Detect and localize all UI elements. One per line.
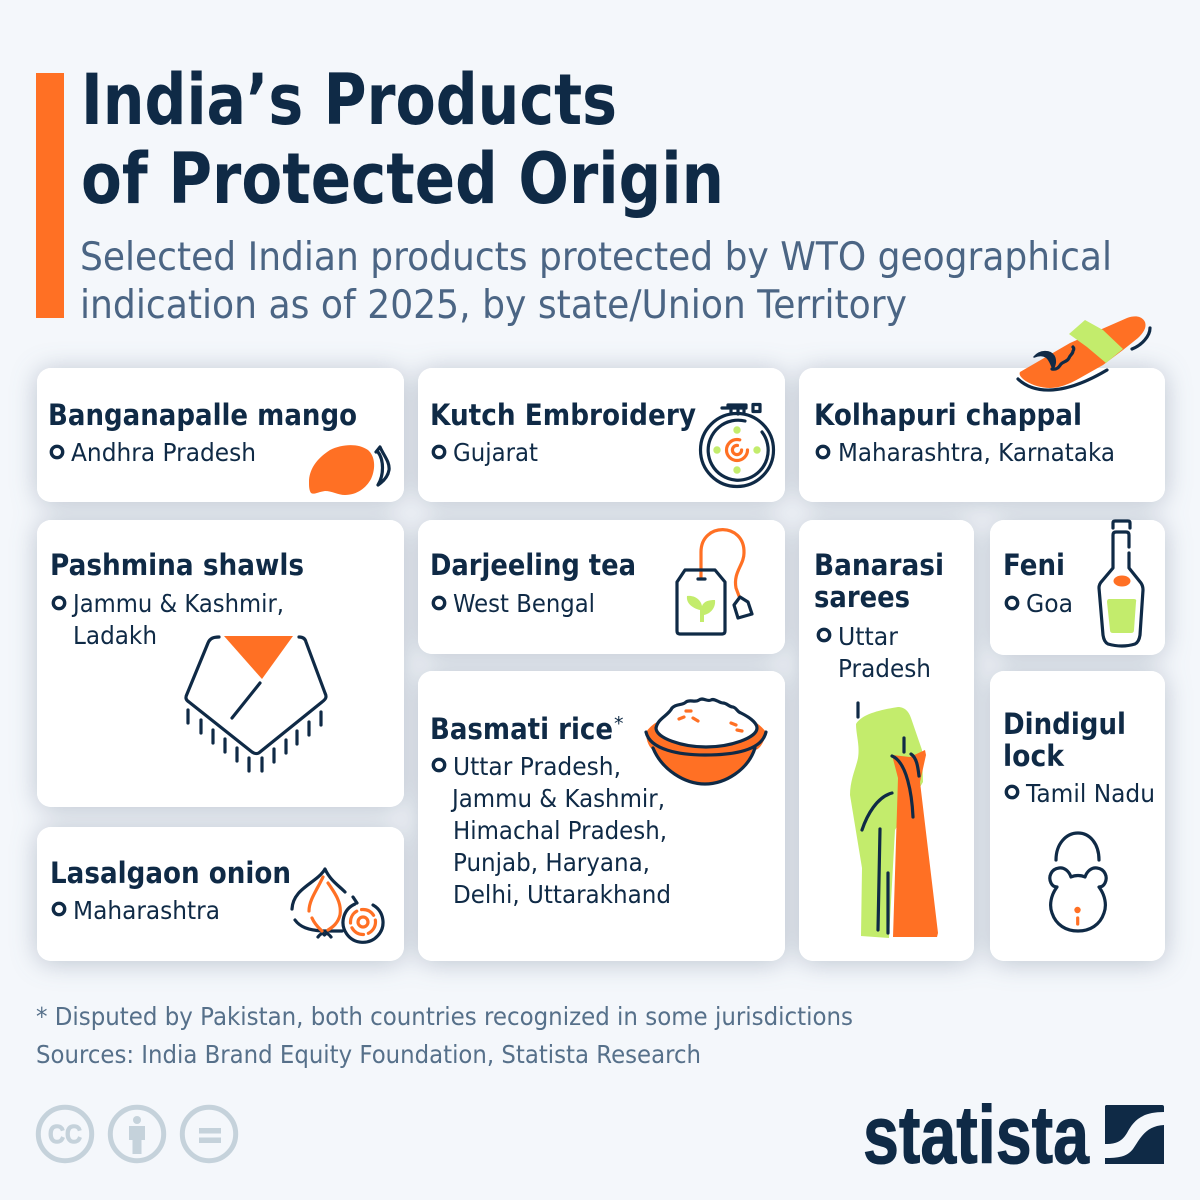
- panel: Basmati rice: Himachal Pradesh,: [453, 816, 667, 845]
- panel: Banganapalle mango: Banganapalle mango: [48, 398, 357, 432]
- panel: Kutch Embroidery: Kutch Embroidery: [430, 398, 696, 432]
- panel: Kolhapuri chappal: [799, 316, 1165, 502]
- icon: saree: [850, 703, 938, 938]
- icon: chappal sandal: [1018, 316, 1150, 390]
- icon: feni bottle: [1099, 521, 1143, 646]
- panel: Pashmina shawls: Pashmina shawls: [50, 548, 304, 582]
- panel: Darjeeling tea: Darjeeling tea: [430, 548, 636, 582]
- subtitle: [80, 235, 1112, 328]
- icon: mango: [309, 445, 389, 495]
- statista logo: statista: [863, 1090, 1090, 1181]
- panel: Kolhapuri chappal: Kolhapuri chappal: [814, 398, 1082, 432]
- panel: Banganapalle mango: Andhra Pradesh: [71, 438, 256, 467]
- panel: Dindigul lock: lock: [1003, 739, 1065, 773]
- panel: Lasalgaon onion: Lasalgaon onion: [50, 856, 291, 890]
- icon: creative commons licence: CC: [48, 1119, 82, 1149]
- panel: Pashmina shawls: [37, 520, 404, 807]
- panel: Feni: Goa: [1026, 589, 1073, 618]
- accent bar: [36, 73, 64, 318]
- panel: Lasalgaon onion: [37, 827, 404, 961]
- panel: Basmati rice: Delhi, Uttarakhand: [453, 880, 671, 909]
- panel: Feni: [990, 520, 1165, 655]
- panel: Basmati rice: [418, 671, 785, 961]
- panel: Dindigul lock: Tamil Nadu: [1025, 779, 1155, 808]
- icon: padlock: [1050, 833, 1106, 931]
- sources: Sources: India Brand Equity Foundation, Statista Research: [36, 1040, 701, 1069]
- panel: Kolhapuri chappal: Maharashtra, Karnataka: [838, 438, 1115, 467]
- icon: onion: [292, 869, 383, 942]
- panel: Basmati rice: Basmati rice: [430, 712, 613, 746]
- panel: Basmati rice: Jammu & Kashmir,: [450, 784, 665, 813]
- panel: Banarasi sarees: Uttar: [838, 622, 899, 651]
- icon: creative commons licence: [38, 1107, 236, 1161]
- footnote: * Disputed by Pakistan, both countries recognized in some jurisdictions: [36, 1002, 853, 1031]
- icon: tea bag: [677, 530, 752, 634]
- panel: Pashmina shawls: Jammu & Kashmir,: [71, 589, 284, 618]
- subtitle: indication as of 2025, by state/Union Territory: [80, 283, 907, 328]
- icon: shawl: [186, 636, 326, 771]
- panel: Banarasi sarees: Banarasi: [814, 548, 944, 582]
- panel: Dindigul lock: [990, 671, 1165, 961]
- title: [81, 59, 724, 220]
- panel: Banganapalle mango: [37, 368, 404, 502]
- panel: Dindigul lock: Dindigul: [1003, 707, 1126, 741]
- panel: Darjeeling tea: [418, 520, 785, 654]
- subtitle: Selected Indian products protected by WTO geographical: [80, 235, 1112, 280]
- panel: Feni: Feni: [1003, 548, 1065, 582]
- panel: Basmati rice: *: [614, 713, 624, 735]
- title: of Protected Origin: [81, 138, 724, 220]
- panel: Lasalgaon onion: Maharashtra: [73, 896, 220, 925]
- panel: Banarasi sarees: sarees: [814, 580, 910, 614]
- icon: rice bowl: [646, 699, 766, 784]
- panel: Basmati rice: Punjab, Haryana,: [453, 848, 650, 877]
- panel: Banarasi sarees: Pradesh: [838, 654, 931, 683]
- panel: Kutch Embroidery: Gujarat: [453, 438, 538, 467]
- panel: Banarasi sarees: [799, 520, 974, 961]
- panel: Kutch Embroidery: [418, 368, 785, 502]
- panel: Basmati rice: Uttar Pradesh,: [453, 752, 621, 781]
- panel: Pashmina shawls: Ladakh: [73, 621, 157, 650]
- icon: embroidery hoop: [700, 404, 774, 486]
- title: India’s Products: [81, 59, 617, 141]
- panel: Darjeeling tea: West Bengal: [453, 589, 595, 618]
